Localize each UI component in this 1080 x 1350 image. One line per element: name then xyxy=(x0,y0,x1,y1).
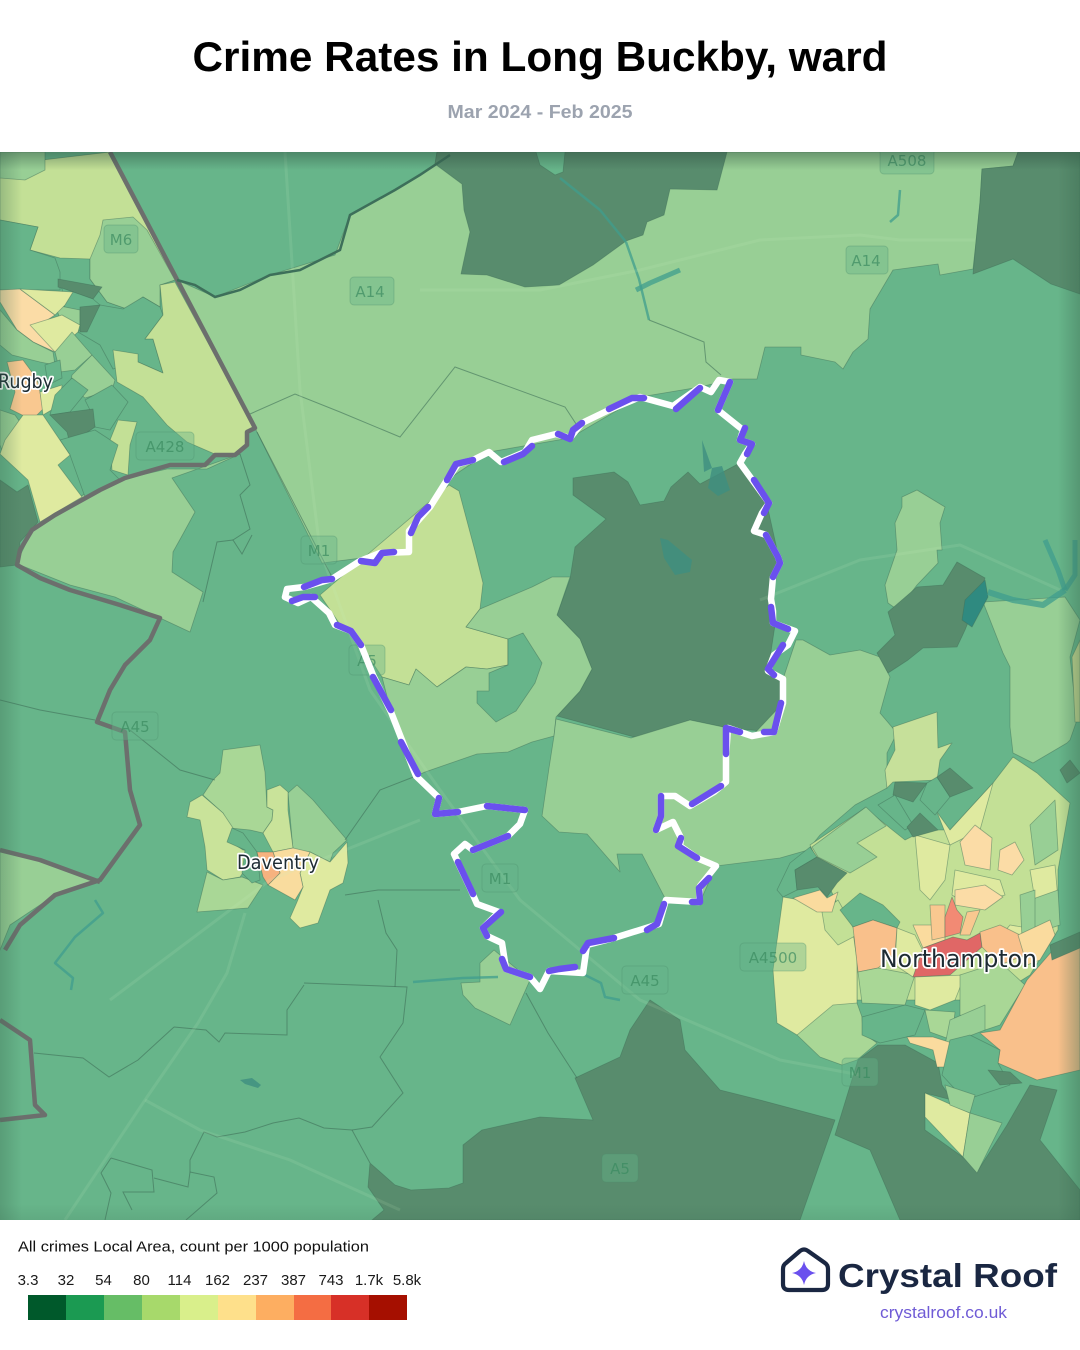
legend xyxy=(18,1238,422,1320)
road badge: A508 xyxy=(880,152,934,174)
road badge: M1 centre: M1 xyxy=(489,870,511,888)
road badge: A4500 xyxy=(740,943,806,971)
road badge: A5 north xyxy=(349,645,385,675)
east areas xyxy=(877,490,988,788)
lakes xyxy=(240,440,730,1088)
county boundary lines xyxy=(0,152,450,1120)
road badge: M1 south xyxy=(842,1058,878,1086)
rivers xyxy=(55,178,1075,1000)
road badge: M1 centre xyxy=(482,864,518,892)
map edge shading xyxy=(0,152,1080,1220)
legend values: 743 xyxy=(318,1272,344,1289)
road badge: A5 south xyxy=(602,1154,638,1182)
road badge: A5 north: A5 xyxy=(357,652,377,670)
legend values: 387 xyxy=(281,1272,306,1289)
road badge: A45 east: A45 xyxy=(630,972,660,990)
ward boundary: white base line xyxy=(285,380,795,989)
legend values: 162 xyxy=(205,1272,230,1289)
road badge: A428: A428 xyxy=(146,438,184,456)
road badge: A4500: A4500 xyxy=(749,949,797,967)
road badge: A428 xyxy=(136,432,194,460)
title: Crime Rates in Long Buckby, ward xyxy=(192,33,888,80)
road badge: A14 east xyxy=(846,246,888,274)
legend values xyxy=(18,1272,422,1289)
legend values: 54 xyxy=(95,1272,112,1289)
place label: Daventry: Daventry xyxy=(237,851,319,874)
road badge: A14 west xyxy=(350,277,394,305)
icon: house with star xyxy=(783,1250,828,1290)
choropleth map xyxy=(0,146,1080,1220)
road badge: A508: A508 xyxy=(888,152,926,170)
legend colour scale xyxy=(28,1295,407,1320)
place label: Northampton: Northampton xyxy=(880,945,1037,973)
road badge: A45 west: A45 xyxy=(120,718,150,736)
brand name: Crystal Roof xyxy=(838,1258,1058,1295)
Rugby wards xyxy=(0,152,255,567)
legend values: 3.3 xyxy=(18,1272,38,1289)
ward boundary: purple dashes xyxy=(292,382,788,977)
minor boundaries and roads xyxy=(0,152,1060,1220)
large rural areas xyxy=(0,152,1080,1220)
road badge: M6: M6 xyxy=(110,231,132,249)
place labels xyxy=(0,370,1037,973)
Northampton wards xyxy=(773,757,1080,1173)
road badge: A14 east: A14 xyxy=(851,252,881,270)
legend values: 80 xyxy=(133,1272,150,1289)
Daventry wards xyxy=(187,745,348,928)
road badge: M1 north xyxy=(301,536,337,564)
road labels xyxy=(104,146,934,1182)
legend values: 32 xyxy=(58,1272,74,1289)
road badge: A45 east xyxy=(622,966,668,994)
brand url: crystalroof.co.uk xyxy=(880,1304,1008,1322)
legend values: 5.8k xyxy=(393,1272,422,1289)
brand logo xyxy=(783,1250,1058,1322)
road badge: A5 south: A5 xyxy=(610,1160,630,1178)
legend values: 114 xyxy=(168,1272,191,1289)
subtitle: date range: Mar 2024 - Feb 2025 xyxy=(448,101,632,122)
road badge: M1 north: M1 xyxy=(308,542,330,560)
road badge: A45 west xyxy=(112,712,158,740)
road badge: A14 west: A14 xyxy=(355,283,385,301)
legend title: All crimes Local Area, count per 1000 population xyxy=(18,1238,369,1256)
ward interior areas xyxy=(320,464,897,902)
legend values: 237 xyxy=(243,1272,268,1289)
road badge: M1 south: M1 xyxy=(849,1064,871,1082)
road badge: M6 xyxy=(104,225,138,253)
legend values: 1.7k xyxy=(355,1272,384,1289)
